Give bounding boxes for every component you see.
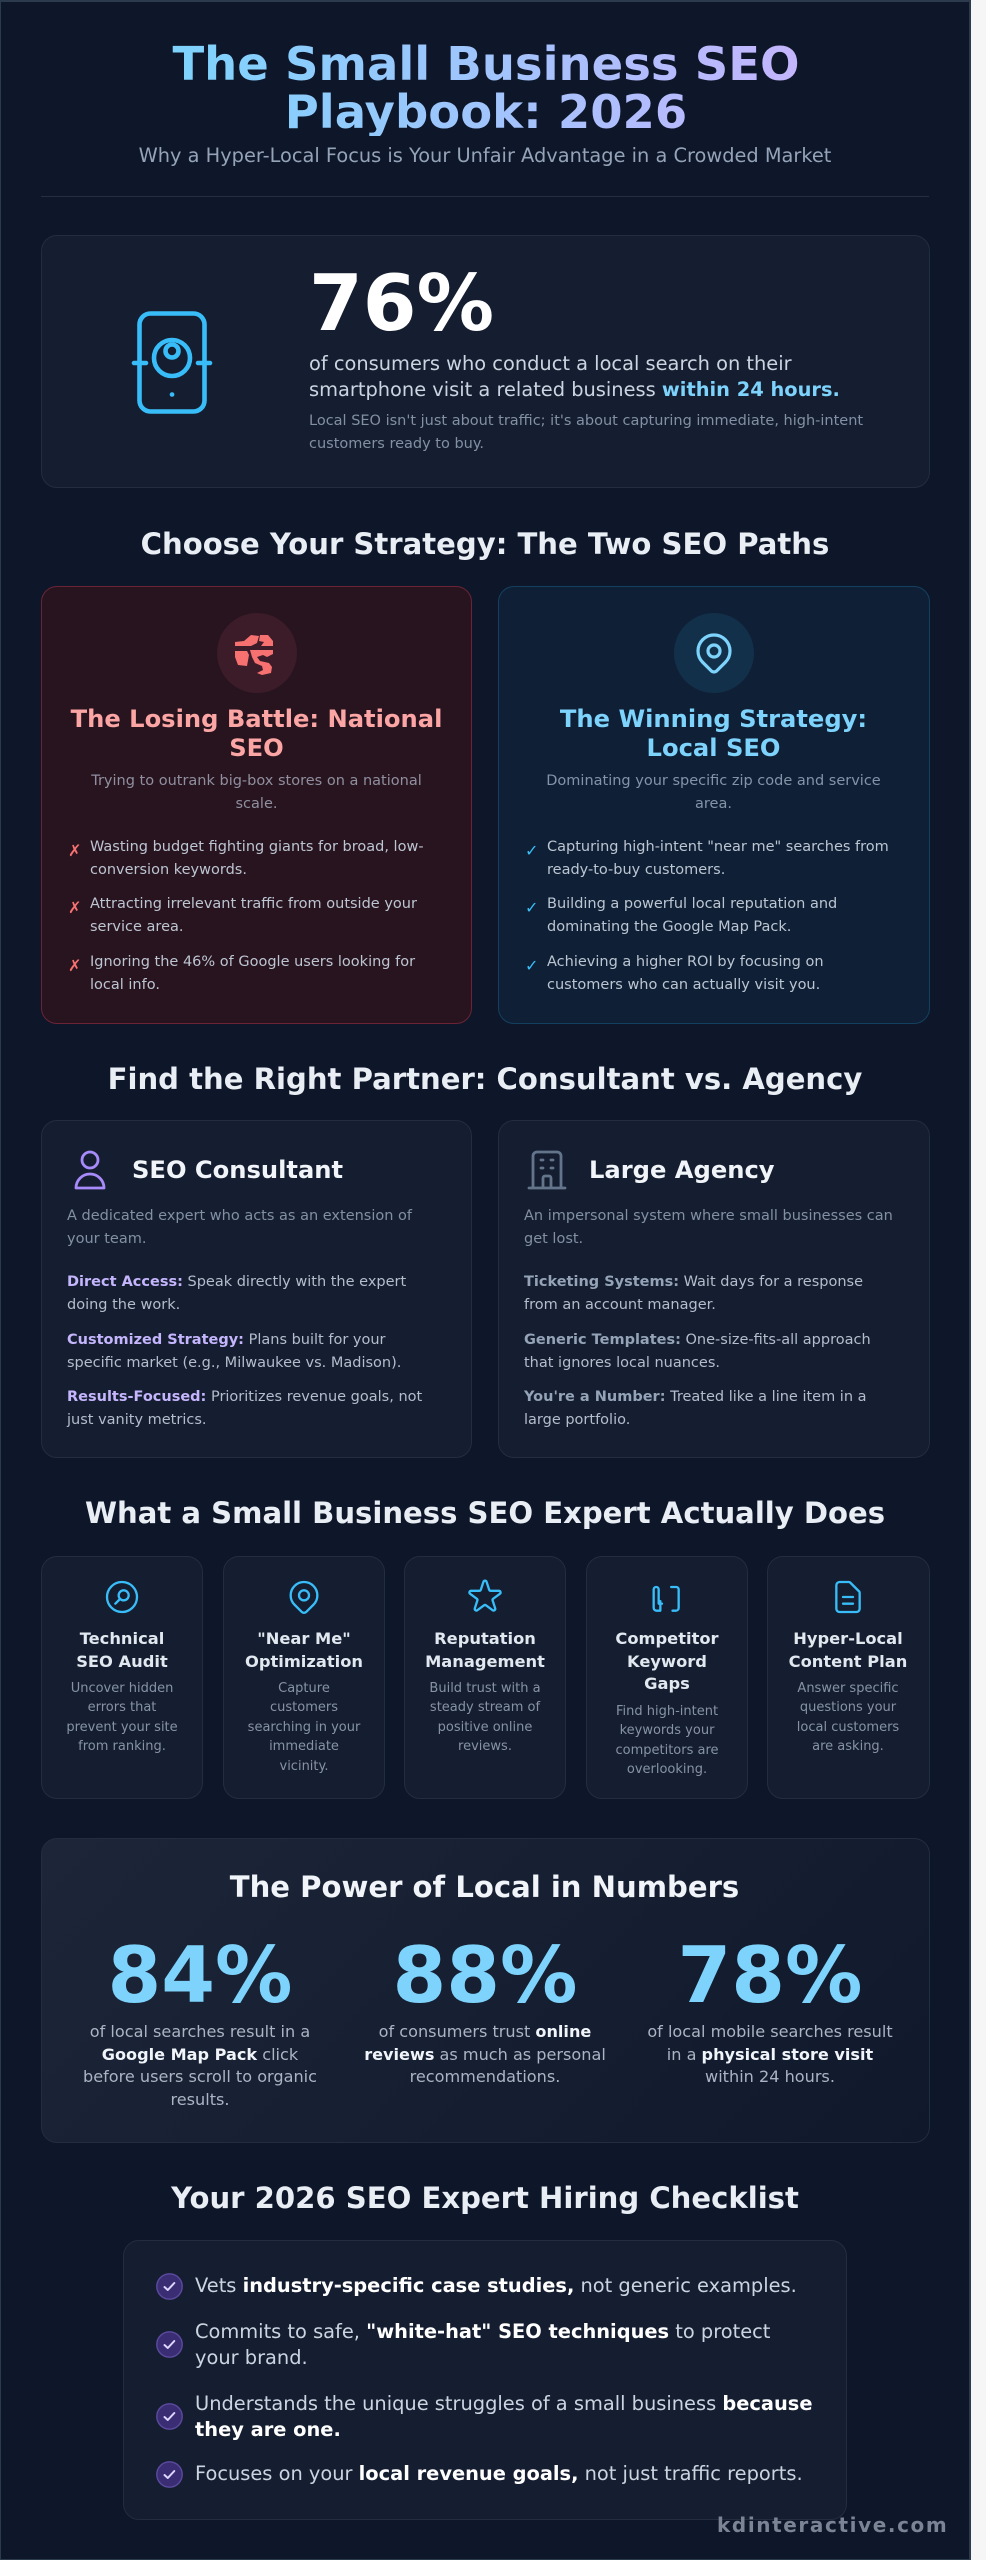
card title (70, 705, 442, 762)
card title: Large Agency (589, 1156, 775, 1184)
icon: smartphone (132, 311, 212, 414)
list item: ✗ (68, 956, 81, 975)
feature (524, 1332, 871, 1371)
tool title: Hyper-Local (793, 1629, 903, 1648)
tool title: Optimization (245, 1652, 363, 1671)
feature (524, 1274, 863, 1313)
card: near me (223, 1556, 385, 1799)
tool description (248, 1681, 360, 1774)
card title: The Losing Battle: National (71, 705, 442, 733)
tool description (429, 1681, 541, 1754)
stat description (309, 352, 840, 401)
tool title (245, 1629, 363, 1671)
stat: map pack: of local searches result in a (90, 2022, 310, 2041)
list item (525, 839, 889, 878)
stat: store visit: of local mobile searches result (647, 2022, 893, 2041)
big stat: 76% (309, 259, 494, 349)
tool title: SEO Audit (76, 1652, 168, 1671)
item (124, 2381, 846, 2451)
tool title: Technical (80, 1629, 164, 1648)
tool description: Find high-intent (616, 1704, 718, 1719)
subtitle: Why a Hyper-Local Focus is Your Unfair Advantage in a Crowded Market (139, 144, 831, 167)
list item (525, 896, 837, 935)
feature (67, 1332, 401, 1371)
card: reputation (404, 1556, 566, 1799)
stat note: customers ready to buy. (309, 436, 484, 452)
list item: local info. (90, 977, 160, 993)
tool title: Keyword (627, 1652, 707, 1671)
tool description: local customers (797, 1720, 899, 1735)
stat: map pack: before users scroll to organic (83, 2067, 317, 2086)
stat note: Local SEO isn't just about traffic; it's about capturing immediate, high-intent (309, 413, 863, 429)
card description: get lost. (524, 1231, 583, 1247)
panel: winning strategy (498, 586, 930, 1024)
tool description: Build trust with a (429, 1681, 541, 1696)
tool description: competitors are (615, 1743, 719, 1758)
card title: Local SEO (647, 734, 780, 762)
icon: scrambled globe (217, 613, 297, 693)
item: Understands the unique struggles of a small business because (195, 2392, 812, 2415)
panel heading: The Power of Local in Numbers (230, 1870, 739, 1904)
card title: SEO Consultant (132, 1156, 343, 1184)
list item: ✓ (525, 841, 538, 860)
stat: reviews: of consumers trust online (379, 2022, 591, 2041)
panel: numbers (41, 1838, 930, 2143)
icon: building (528, 1150, 566, 1190)
feature: from an account manager. (524, 1297, 716, 1313)
list item: Capturing high-intent "near me" searches from (547, 839, 889, 855)
card description: A dedicated expert who acts as an extension of (67, 1208, 412, 1224)
panel: hero stat (41, 235, 930, 488)
stat note (309, 413, 863, 452)
item (124, 2241, 846, 2311)
list item: ready-to-buy customers. (547, 862, 725, 878)
item: Commits to safe, "white-hat" SEO techniques to protect (195, 2320, 770, 2343)
heading: expert: What a Small Business SEO Expert Actually Does (85, 1496, 885, 1530)
tool description: reviews. (458, 1739, 512, 1754)
icon: document (835, 1580, 861, 1614)
feature (67, 1274, 406, 1313)
icon: star (468, 1580, 502, 1612)
panel: losing battle (41, 586, 472, 1024)
list item (525, 954, 824, 993)
stat: store visit (639, 1935, 901, 2125)
feature (66, 1389, 422, 1428)
list item: conversion keywords. (90, 862, 247, 878)
stat: map pack (69, 1935, 331, 2125)
item (124, 2451, 846, 2511)
stat: reviews: reviews as much as personal (364, 2044, 606, 2064)
list item: Attracting irrelevant traffic from outside your (90, 896, 417, 912)
list item (68, 954, 416, 993)
tool description: immediate (269, 1739, 339, 1754)
tool title: Management (425, 1652, 545, 1671)
card description: area. (695, 796, 732, 812)
list item: Ignoring the 46% of Google users looking for (90, 954, 415, 970)
tool description: Answer specific (797, 1681, 899, 1696)
tool description: keywords your (620, 1723, 714, 1738)
tool description: prevent your site (66, 1720, 178, 1735)
list item: ✓ (525, 898, 538, 917)
feature: large portfolio. (524, 1412, 630, 1428)
tool description: questions your (800, 1700, 896, 1715)
card: technical audit (41, 1556, 203, 1799)
list item: ✗ (68, 898, 81, 917)
feature: just vanity metrics. (67, 1412, 206, 1428)
tool description (615, 1704, 719, 1777)
tool description: are asking. (812, 1739, 884, 1754)
card: competitor gaps (586, 1556, 748, 1799)
tool description: searching in your (248, 1720, 360, 1735)
feature: specific market (e.g., Milwaukee vs. Madison). (67, 1355, 401, 1371)
card description (546, 773, 881, 812)
panel: large agency (498, 1120, 930, 1458)
feature: Ticketing Systems: Wait days for a response (524, 1274, 863, 1290)
tool title (789, 1629, 907, 1671)
stat description: of consumers who conduct a local search on their (309, 352, 792, 375)
list item: ✓ (525, 956, 538, 975)
stat: map pack: Google Map Pack click (102, 2044, 298, 2064)
item: your brand. (195, 2346, 308, 2369)
card description (91, 773, 422, 812)
card title: The Winning Strategy: (560, 705, 867, 733)
feature: Direct Access: Speak directly with the expert (67, 1274, 406, 1290)
feature: that ignores local nuances. (524, 1355, 720, 1371)
stat: reviews: 88% (392, 1931, 578, 2021)
stat: store visit: within 24 hours. (705, 2067, 835, 2086)
stat: map pack: results. (170, 2090, 230, 2108)
tool description: vicinity. (280, 1759, 328, 1774)
feature (524, 1389, 867, 1428)
card description: Trying to outrank big-box stores on a national (91, 773, 422, 789)
card description: your team. (67, 1231, 146, 1247)
card description (524, 1208, 893, 1247)
list item: Achieving a higher ROI by focusing on (547, 954, 824, 970)
tool description: steady stream of (430, 1700, 540, 1715)
tool description (797, 1681, 899, 1754)
header divider (41, 196, 929, 197)
title (172, 37, 800, 139)
list item: dominating the Google Map Pack. (547, 919, 791, 935)
list item (68, 839, 424, 878)
item: Focuses on your local revenue goals, not just traffic reports. (195, 2462, 803, 2485)
tool description: positive online (438, 1720, 532, 1735)
tool description: errors that (88, 1700, 156, 1715)
tool title (615, 1629, 719, 1693)
icon: brackets (652, 1586, 680, 1612)
icon: user (74, 1150, 106, 1190)
card description: Dominating your specific zip code and service (546, 773, 881, 789)
heading: partner: Find the Right Partner: Consultant vs. Agency (108, 1062, 862, 1096)
tool title: Competitor (615, 1629, 719, 1648)
item: they are one. (195, 2418, 341, 2441)
list item: ✗ (68, 841, 81, 860)
stat: store visit: in a physical store visit (667, 2044, 873, 2064)
feature: Generic Templates: One-size-fits-all approach (524, 1332, 871, 1348)
icon: search circle (106, 1580, 138, 1614)
tool description: Uncover hidden (71, 1681, 173, 1696)
panel: SEO consultant (41, 1120, 472, 1458)
stat: reviews: recommendations. (410, 2067, 560, 2086)
tool title: Content Plan (789, 1652, 907, 1671)
item (124, 2311, 846, 2381)
stat: reviews (354, 1935, 616, 2125)
tool title (425, 1629, 545, 1671)
tool description: overlooking. (627, 1762, 707, 1777)
list item: Building a powerful local reputation and (547, 896, 837, 912)
title: Playbook: 2026 (285, 85, 687, 139)
card description: scale. (236, 796, 277, 812)
feature: Customized Strategy: Plans built for your (67, 1332, 386, 1348)
watermark: kdinteractive.com (717, 2513, 948, 2537)
card title: SEO (229, 734, 284, 762)
tool title: Gaps (644, 1674, 690, 1693)
title: The Small Business SEO (172, 37, 800, 91)
icon: location pin (290, 1580, 318, 1614)
feature: You're a Number: Treated like a line item in a (524, 1389, 867, 1405)
heading: strategy: Choose Your Strategy: The Two SEO Paths (141, 527, 829, 561)
tool description: customers (270, 1700, 338, 1715)
tool description: from ranking. (78, 1739, 166, 1754)
card description (67, 1208, 412, 1247)
card: content plan (767, 1556, 930, 1799)
stat: store visit: 78% (677, 1931, 862, 2021)
list item: Wasting budget fighting giants for broad, low- (90, 839, 424, 855)
feature: Results-Focused: Prioritizes revenue goals, not (67, 1389, 422, 1405)
feature: doing the work. (67, 1297, 180, 1313)
tool title: "Near Me" (257, 1629, 351, 1648)
tool title (76, 1629, 168, 1671)
icon: location pin (674, 613, 754, 693)
stat description: smartphone visit a related business within 24 hours. (309, 378, 840, 401)
tool description: Capture (278, 1681, 330, 1696)
heading: checklist: Your 2026 SEO Expert Hiring Checklist (171, 2181, 799, 2215)
list item (68, 896, 417, 935)
card description: An impersonal system where small businesses can (524, 1208, 893, 1224)
stat: map pack: 84% (107, 1931, 292, 2021)
tool description (66, 1681, 178, 1754)
card title (560, 705, 867, 762)
list item: customers who can actually visit you. (547, 977, 820, 993)
header (41, 37, 929, 197)
list item: service area. (90, 919, 184, 935)
panel: checklist (123, 2240, 847, 2520)
tool title: Reputation (434, 1629, 536, 1648)
item: Vets industry-specific case studies, not generic examples. (195, 2274, 797, 2297)
